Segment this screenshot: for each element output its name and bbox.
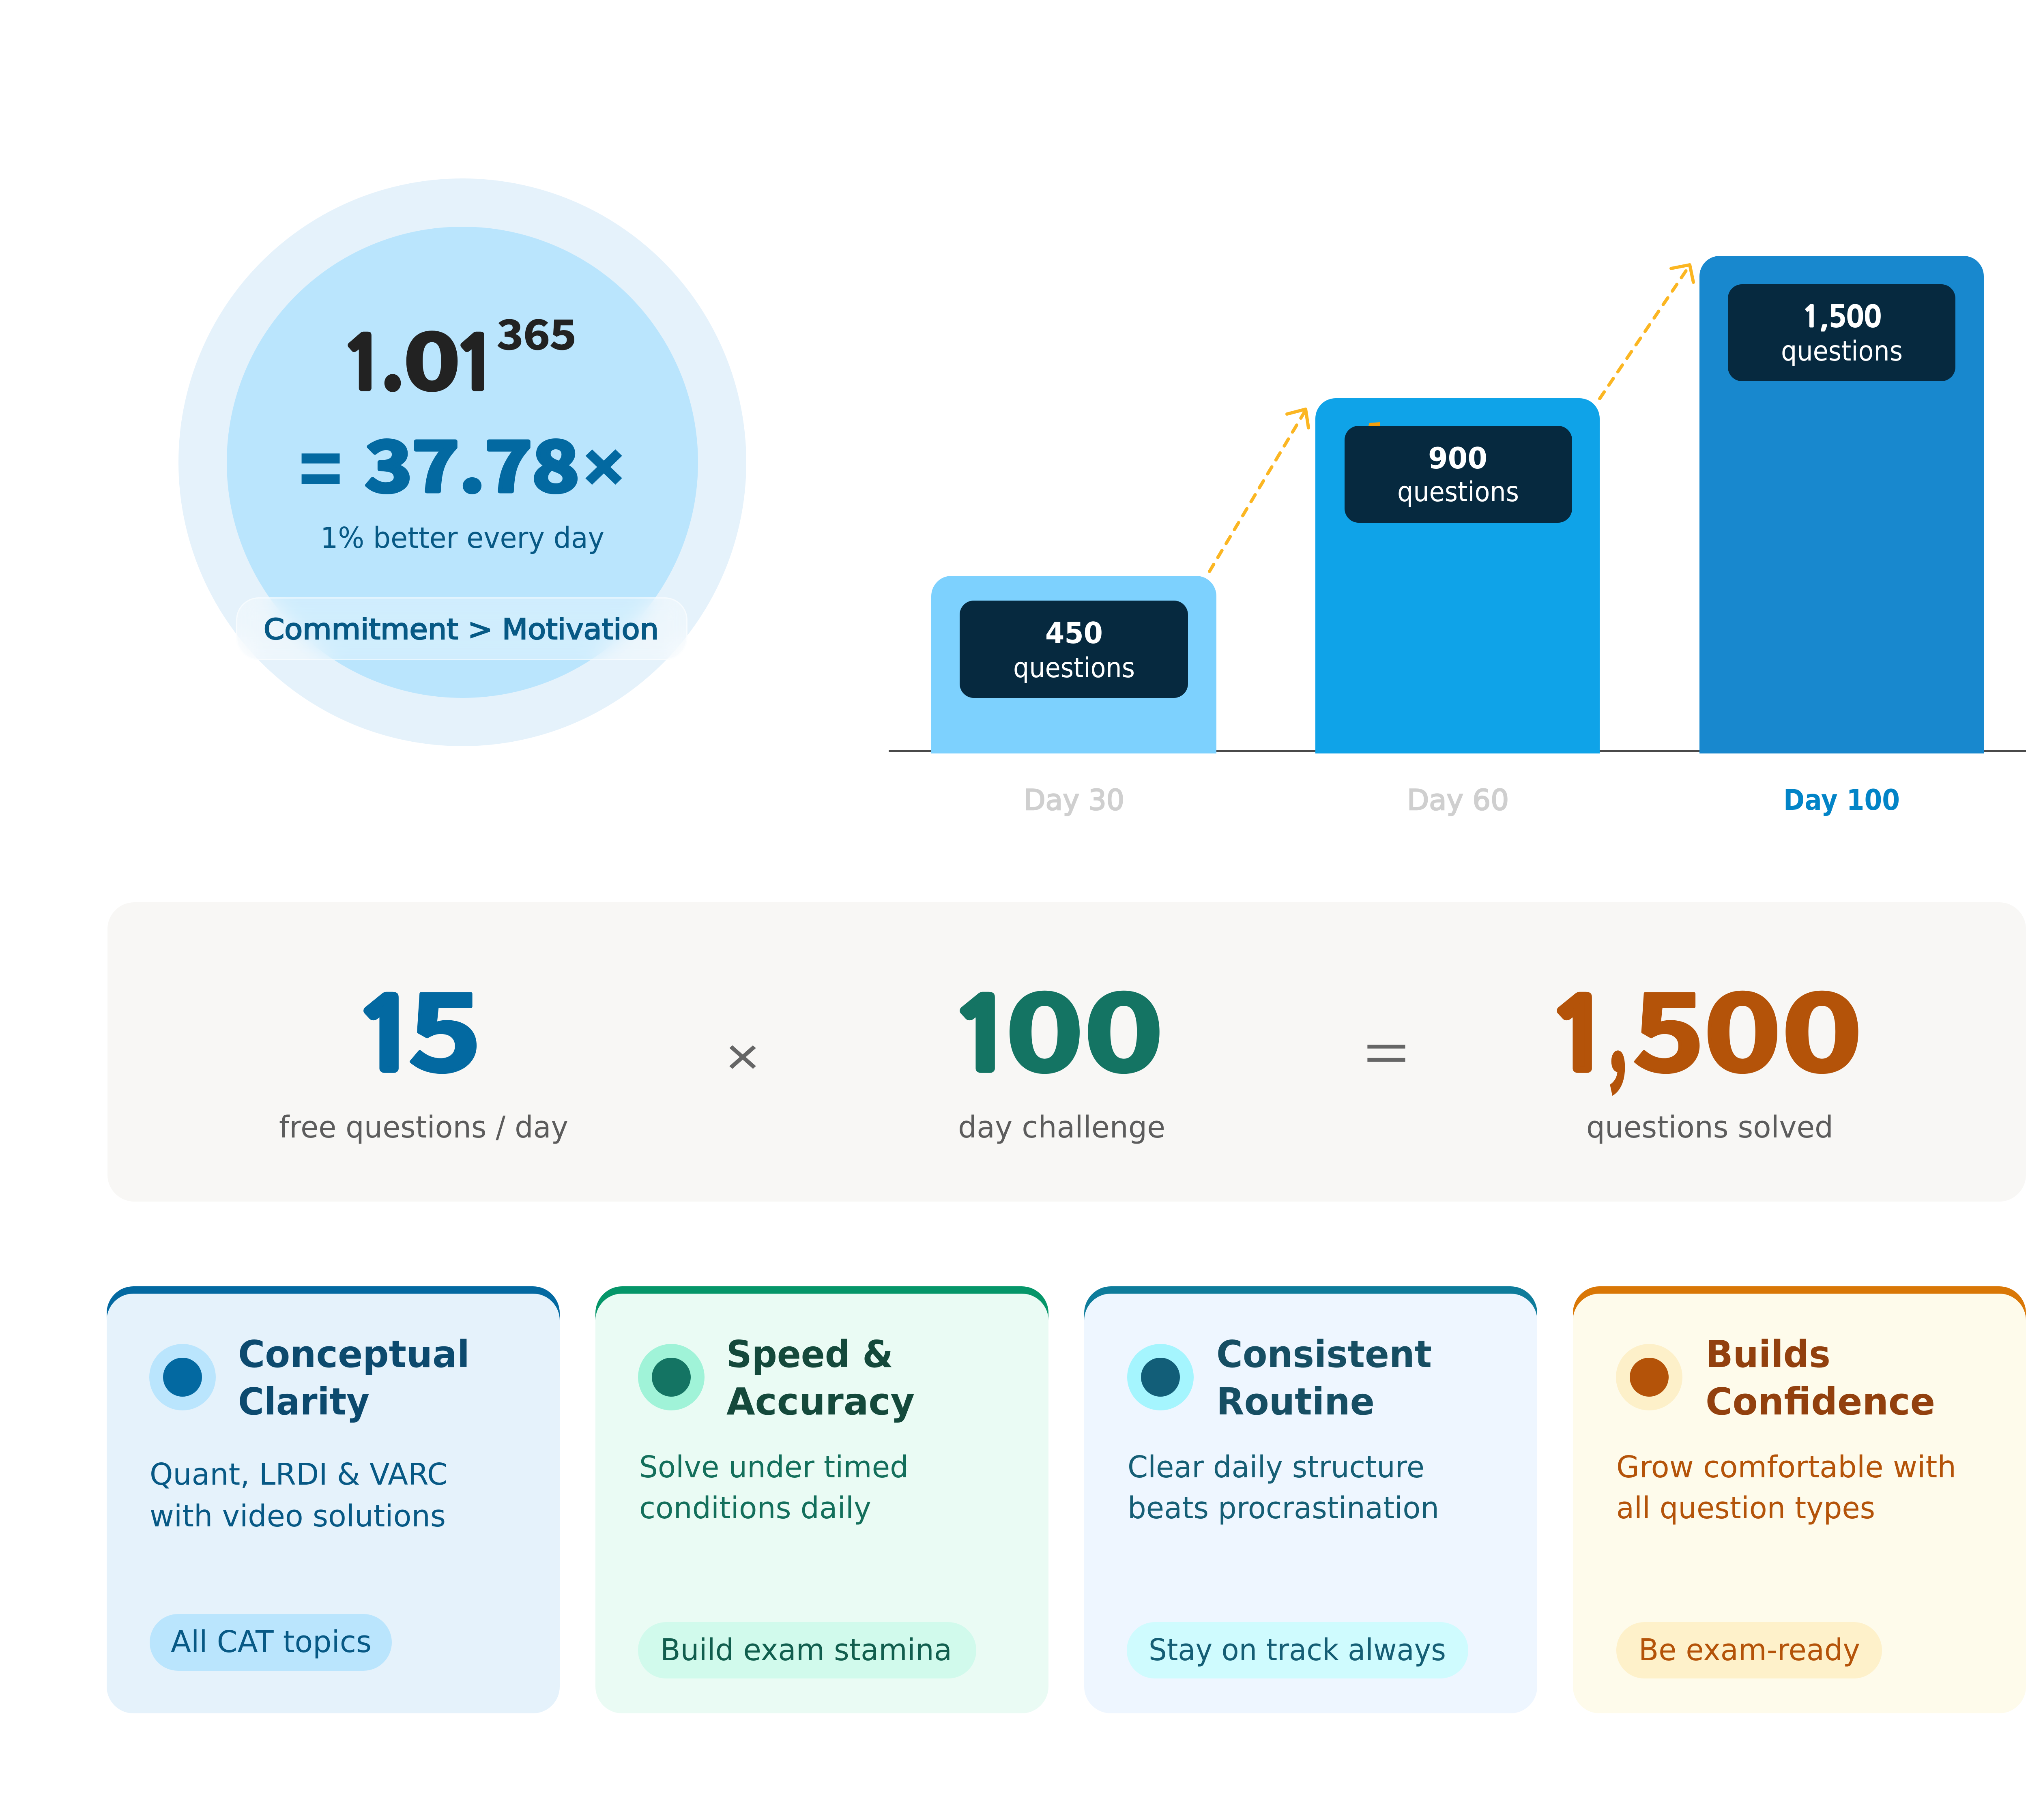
icon: orange dot <box>1616 1344 1682 1410</box>
term: 1,500 questions solved: , <box>1608 947 1627 1102</box>
axis label: Day 60: Day 60 <box>1407 783 1509 817</box>
bar: Day 100: 1,500 <box>1802 302 1882 331</box>
panel: challenge equation <box>107 902 2026 1202</box>
bar: Day 30 <box>931 576 1216 753</box>
heading: Builds Confidence: Builds <box>1706 1333 1830 1376</box>
term: 1,500 questions solved: 0 <box>1704 947 1781 1102</box>
heading: Builds Confidence: Confidence <box>1706 1380 1935 1423</box>
panel: compounding circle <box>178 178 746 746</box>
formula: 1.01 to the power of 365: . <box>380 296 405 413</box>
formula: 1.01 to the power of 365: 1 <box>340 328 387 400</box>
heading: Consistent Routine <box>1216 1333 1432 1423</box>
term: 15 free questions per day: free questions / day <box>279 1110 568 1145</box>
term: 1,500 questions solved <box>1546 947 1863 1145</box>
bar: Day 30: 450 <box>1045 616 1103 650</box>
bar: Day 60: questions <box>1397 476 1519 508</box>
arrow: Day 60 to Day 100 <box>1600 265 1693 399</box>
tag: Stay on track always: Stay on track always <box>1149 1633 1446 1668</box>
bar: Day 60: 900 <box>1428 441 1487 475</box>
tag: Be exam-ready: Be exam-ready <box>1639 1633 1860 1668</box>
bar: Day 100: questions <box>1781 335 1903 367</box>
chart: questions solved over the challenge <box>889 256 2026 824</box>
description <box>1128 1450 1439 1526</box>
badge: Commitment > Motivation: Commitment > Motivation <box>264 613 659 646</box>
result: equals 37.78 times: × <box>584 430 623 502</box>
term: 1,500 questions solved: questions solved <box>1586 1110 1833 1145</box>
tag: Stay on track always <box>1127 1622 1468 1678</box>
badge: Commitment > Motivation <box>236 597 687 660</box>
term: 1,500 questions solved: 1 <box>1546 987 1613 1084</box>
term: 15 free questions per day: 1 <box>353 987 420 1084</box>
operator: times: × <box>725 1027 760 1086</box>
description <box>150 1457 448 1534</box>
formula: 1.01 to the power of 365: 1 <box>453 328 500 400</box>
term: 100 day challenge: day challenge <box>958 1110 1165 1145</box>
axis label: Day 100: Day 100 <box>1783 783 1900 817</box>
description: Solve under timed <box>639 1450 909 1485</box>
bar: Day 30: questions <box>1013 652 1135 684</box>
heading: Conceptual Clarity: Conceptual <box>238 1333 470 1376</box>
bar: Day 100 <box>1699 256 1984 753</box>
icon: green dot <box>638 1344 705 1410</box>
heading: Builds Confidence <box>1706 1333 1935 1423</box>
tag: Build exam stamina: Build exam stamina <box>660 1633 952 1668</box>
description: with video solutions <box>150 1499 446 1534</box>
formula: 1.01 to the power of 365 <box>340 296 576 413</box>
result: equals 37.78 times: 37.78 <box>365 410 579 512</box>
description: Grow comfortable with <box>1616 1450 1956 1485</box>
tag: All CAT topics: All CAT topics <box>171 1625 372 1659</box>
term: 15 free questions per day <box>279 947 568 1145</box>
formula: 1.01 to the power of 365: 365 <box>497 302 576 361</box>
heading: Speed & Accuracy: Accuracy <box>726 1380 915 1423</box>
description: Clear daily structure <box>1128 1450 1424 1485</box>
description: beats procrastination <box>1128 1491 1439 1526</box>
heading: Conceptual Clarity: Clarity <box>238 1380 370 1423</box>
card: Consistent Routine <box>1084 1286 1537 1713</box>
term: 100 day challenge: 0 <box>1084 947 1164 1102</box>
description: Quant, LRDI & VARC <box>150 1457 448 1492</box>
heading: Conceptual Clarity <box>238 1333 470 1423</box>
operator: equals: = <box>1364 1023 1409 1082</box>
description <box>1616 1450 1956 1526</box>
term: 1,500 questions solved: 0 <box>1781 947 1863 1102</box>
heading: Speed & Accuracy <box>726 1333 915 1423</box>
card: Builds Confidence <box>1573 1286 2026 1713</box>
icon: blue dot <box>149 1344 216 1410</box>
tag: Build exam stamina <box>638 1622 976 1678</box>
tag: All CAT topics <box>150 1614 392 1671</box>
term: 1,500 questions solved: 5 <box>1633 947 1705 1102</box>
result: equals 37.78 times <box>299 410 623 512</box>
heading: Consistent Routine: Consistent <box>1216 1333 1432 1376</box>
description: all question types <box>1616 1491 1875 1526</box>
heading: Speed & Accuracy: Speed & <box>726 1333 893 1376</box>
axis label: Day 30: Day 30 <box>1024 783 1124 817</box>
caption: 1% better every day: 1% better every day <box>320 521 604 555</box>
tag: Be exam-ready <box>1616 1622 1882 1678</box>
term: 100 day challenge <box>949 947 1165 1145</box>
arrow: Day 30 to Day 60 <box>1209 409 1308 571</box>
bar: Day 60 <box>1315 398 1600 753</box>
heading: Consistent Routine: Routine <box>1216 1380 1375 1423</box>
term: 100 day challenge: 0 <box>1005 947 1084 1102</box>
formula: 1.01 to the power of 365: 0 <box>404 298 460 412</box>
term: 100 day challenge: 1 <box>949 987 1016 1084</box>
description: conditions daily <box>639 1491 871 1526</box>
result: equals 37.78 times: = <box>299 425 342 511</box>
card: Conceptual Clarity <box>107 1286 560 1713</box>
description <box>639 1450 909 1526</box>
term: 15 free questions per day: 5 <box>408 947 482 1102</box>
icon: teal dot <box>1127 1344 1194 1410</box>
card: Speed & Accuracy <box>595 1286 1048 1713</box>
